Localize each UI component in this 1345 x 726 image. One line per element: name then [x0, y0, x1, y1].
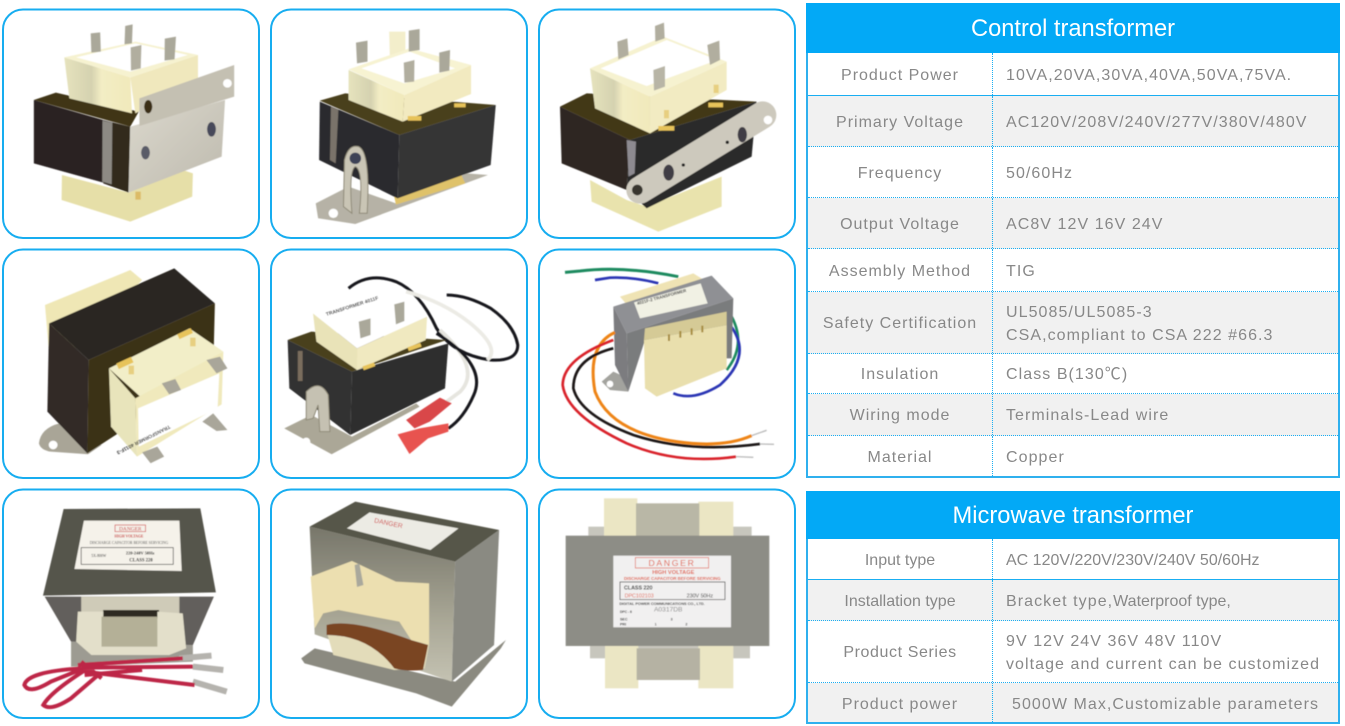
photo card 9: microwave transformer front view with danger label [539, 490, 795, 718]
panel: control transformer table [806, 3, 1340, 478]
photo card 6: grey core transformer with coloured leads [539, 250, 795, 478]
photo card 7: microwave transformer top view with red leads: HIGH VOLTAGE [114, 535, 144, 539]
row: product power: 5000W Max,Customizable parameters [1012, 696, 1319, 713]
row: product power: Product power [842, 696, 958, 713]
row: safety certification: CSA,compliant to CSA 222 #66.3 [1006, 326, 1274, 344]
photo card 8: microwave transformer angled view with copper coil: DANGER [374, 517, 403, 530]
photo card 6: grey core transformer with coloured leads: 4021F-2 TRANSFORMER [636, 288, 688, 306]
product photo grid [2, 8, 796, 719]
row: assembly method: TIG [1006, 263, 1036, 280]
row: insulation: Insulation [861, 366, 939, 383]
row: insulation: Class B(130℃) [1006, 366, 1128, 383]
photo card 9: microwave transformer front view with danger label: A0317DB [654, 607, 683, 614]
row: product power [808, 683, 1338, 722]
row: product power: 10VA,20VA,30VA,40VA,50VA,75VA. [1006, 67, 1292, 84]
photo card 7: microwave transformer top view with red leads: 220-240V 50Hz [126, 550, 155, 555]
photo card 5: transformer with lead wires and red connectors [271, 250, 527, 478]
row: product series: voltage and current can be customized [1006, 656, 1320, 672]
row: insulation [808, 354, 1338, 394]
row: primary voltage: AC120V/208V/240V/277V/380V/480V [1006, 114, 1308, 131]
row: frequency [808, 147, 1338, 198]
row: primary voltage [808, 96, 1338, 147]
row: primary voltage: Primary Voltage [836, 114, 964, 131]
heading: microwave transformer [806, 491, 1340, 539]
photo card 8: microwave transformer angled view with copper coil [271, 490, 527, 718]
heading: control transformer: Control transformer [971, 16, 1175, 42]
photo card 4: transformer with label facing front: TRANSFORMER 4011F-3 [115, 423, 171, 455]
photo card 7: microwave transformer top view with red leads: 5X-800W [91, 554, 107, 558]
photo card 9: microwave transformer front view with danger label: SEC [620, 617, 628, 621]
row: frequency: 50/60Hz [1006, 165, 1073, 182]
photo card 4: transformer with label facing front [3, 250, 259, 478]
row: installation type [808, 580, 1338, 621]
row: frequency: Frequency [858, 165, 942, 182]
photo card 9: microwave transformer front view with danger label: 2 [685, 623, 687, 627]
photo card 9: microwave transformer front view with danger label: HIGH VOLTAGE [652, 570, 695, 576]
row: wiring mode [808, 394, 1338, 436]
row: safety certification [808, 292, 1338, 354]
row: output voltage [808, 198, 1338, 249]
photo card 9: microwave transformer front view with danger label: CLASS 220 [624, 586, 652, 592]
photo card 9: microwave transformer front view with danger label: DISCHARGE CAPACITOR BEFORE SERVICING [624, 576, 721, 581]
row: material: Material [868, 449, 932, 466]
row: installation type: Bracket type,Waterproof type, [1006, 593, 1231, 610]
row: wiring mode: Terminals-Lead wire [1006, 407, 1169, 424]
row: material: Copper [1006, 449, 1065, 466]
row: safety certification: Safety Certification [823, 315, 977, 332]
photo card 7: microwave transformer top view with red leads: DISCHARGE CAPACITOR BEFORE SERVICING [90, 541, 168, 545]
photo card 9: microwave transformer front view with danger label: 3 [671, 618, 673, 622]
photo card 5: transformer with lead wires and red connectors: TRANSFORMER 4011F [325, 296, 379, 318]
panel: microwave transformer table [806, 491, 1340, 724]
row: product series: 9V 12V 24V 36V 48V 110V [1006, 633, 1222, 650]
heading: microwave transformer: Microwave transformer [953, 503, 1193, 529]
photo card 7: microwave transformer top view with red leads: CLASS 220 [129, 559, 153, 564]
row: wiring mode: Wiring mode [850, 407, 950, 424]
photo card 9: microwave transformer front view with danger label: 230V 50Hz [687, 594, 713, 600]
photo card 9: microwave transformer front view with danger label: DANGER [648, 558, 696, 568]
row: material [868, 436, 1065, 476]
photo card 9: microwave transformer front view with danger label: DIGITAL POWER COMMUNICATIONS CO., LTD. [619, 602, 705, 606]
photo card 1: transformer with flat bracket [3, 10, 259, 238]
row: product series [808, 621, 1338, 683]
photo card 9: microwave transformer front view with danger label: 1 [655, 623, 657, 627]
photo card 7: microwave transformer top view with red leads [3, 490, 259, 718]
photo card 9: microwave transformer front view with danger label: DPC102103 [625, 594, 654, 600]
row: assembly method [808, 249, 1338, 292]
row: product power: Product Power [841, 67, 959, 84]
row: installation type: Installation type [844, 593, 956, 610]
heading: control transformer [806, 3, 1340, 53]
row: input type: Input type [865, 552, 935, 569]
photo card 7: microwave transformer top view with red leads: DANGER [119, 526, 142, 532]
row: safety certification: UL5085/UL5085-3 [1006, 304, 1153, 321]
row: input type: AC 120V/220V/230V/240V 50/60Hz [1006, 552, 1260, 569]
row: input type [808, 539, 1338, 580]
row: assembly method: Assembly Method [829, 263, 971, 280]
photo card 9: microwave transformer front view with danger label: PRI [620, 623, 626, 627]
photo card 9: microwave transformer front view with danger label: DPC - 6 [620, 610, 632, 614]
photo card 3: transformer with rounded plate bracket [539, 10, 795, 238]
row: output voltage: AC8V 12V 16V 24V [1006, 216, 1164, 233]
row: product series: Product Series [843, 644, 957, 661]
row: product power [808, 53, 1338, 96]
photo card 2: transformer with folded base bracket [271, 10, 527, 238]
row: output voltage: Output Voltage [840, 216, 960, 233]
